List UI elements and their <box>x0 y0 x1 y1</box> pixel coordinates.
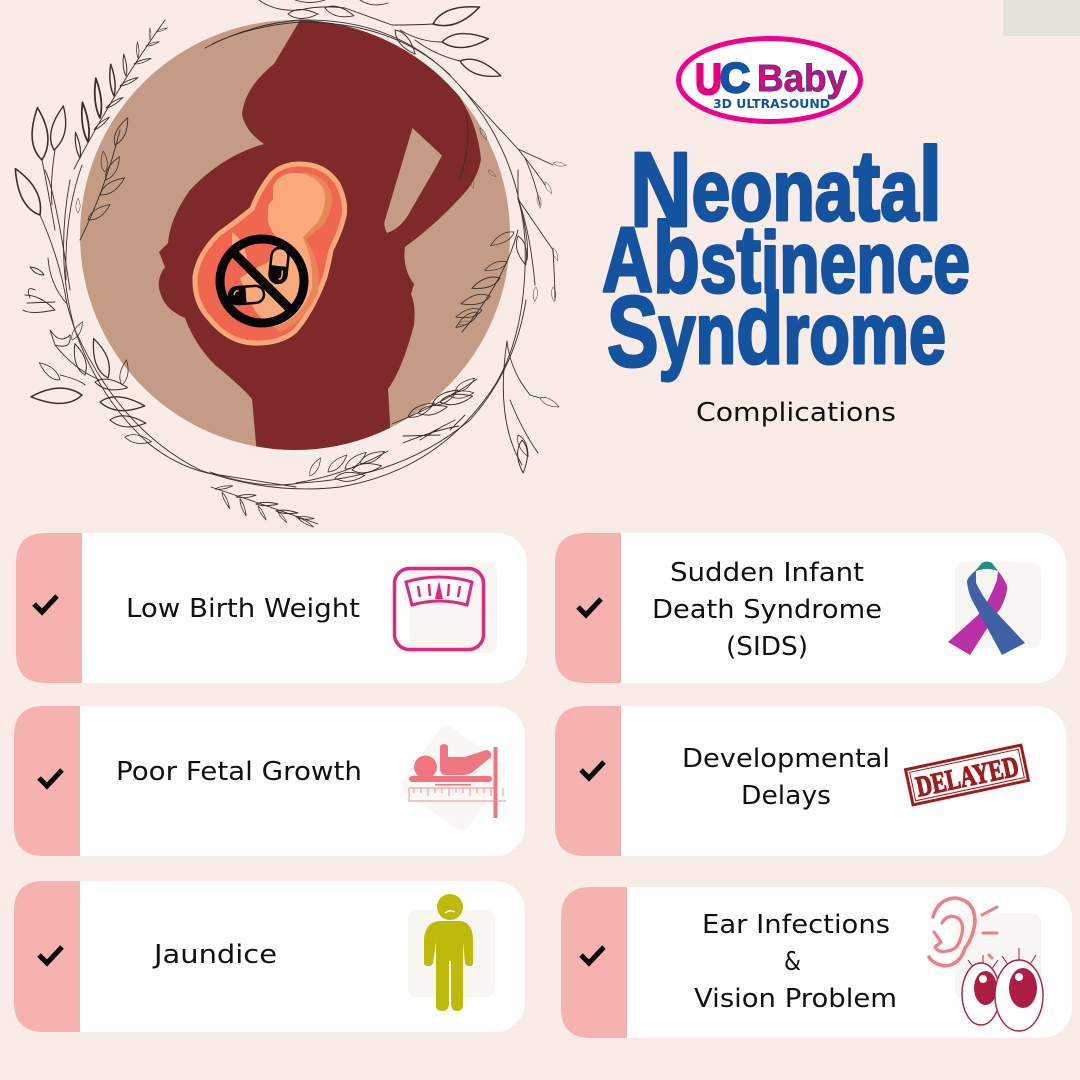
lower right branches <box>503 341 540 465</box>
illustration: pregnant silhouette in circle <box>80 10 510 455</box>
panel: SIDS: Death Syndrome <box>652 595 882 625</box>
bottom sprigs <box>296 451 388 483</box>
logo: C <box>720 54 750 101</box>
right upper branch <box>459 85 553 205</box>
panel: low birth weight <box>16 533 527 683</box>
fetus <box>255 173 332 332</box>
logo <box>678 38 860 122</box>
no drugs sign <box>220 239 304 323</box>
icon: awareness ribbon <box>948 562 1041 655</box>
logo tagline: 3D ULTRASOUND <box>713 97 830 111</box>
icon: scale <box>394 563 497 653</box>
title: b <box>653 202 700 314</box>
logo mark: UC: U <box>695 55 722 104</box>
panel: SIDS <box>555 533 1066 683</box>
panel: developmental delays <box>555 706 1066 856</box>
uterus <box>195 164 345 343</box>
title: N <box>630 131 692 249</box>
panel: SIDS: Sudden Infant <box>670 558 864 588</box>
left long leaves <box>40 150 70 304</box>
panel: low birth weight: Low Birth Weight <box>126 594 360 624</box>
panel: ear infections and vision problem <box>561 887 1072 1038</box>
subtitle: Complications <box>696 398 896 428</box>
corner image fragment <box>1003 0 1080 36</box>
panel: SIDS: (SIDS) <box>726 632 808 662</box>
title: eona <box>692 143 854 239</box>
panel: developmental delays: Delays <box>741 781 831 811</box>
panel: ear infections and vision problem: Vision Problem <box>694 984 897 1014</box>
icon: measuring infant <box>398 722 510 834</box>
panel: ear infections and vision problem: Ear Infections <box>702 910 890 940</box>
right bud branches <box>518 199 555 300</box>
icon: jaundiced person <box>408 894 495 1011</box>
left feather <box>74 20 165 169</box>
panel: jaundice: Jaundice <box>152 940 277 970</box>
panel: poor fetal growth <box>14 706 525 856</box>
illustration: botanical wreath <box>8 0 567 528</box>
title: stinence <box>700 206 1033 313</box>
title: A <box>602 209 653 311</box>
title: drome <box>736 273 994 385</box>
silhouette <box>159 10 481 455</box>
title: tal <box>853 127 948 243</box>
icon: delayed stamp: DELAYED <box>913 750 1022 803</box>
lower left leaves <box>50 304 296 487</box>
title: yn <box>659 286 736 382</box>
panel: poor fetal growth: Poor Fetal Growth <box>116 757 362 787</box>
panel: ear infections and vision problem: & <box>784 947 801 977</box>
title: S <box>607 276 659 388</box>
top sprigs <box>259 0 433 25</box>
logo wordmark: Baby: Baby <box>757 58 847 100</box>
inner left sprig <box>80 130 120 240</box>
icon: ear and eyes <box>929 898 1043 1031</box>
panel: jaundice <box>14 881 525 1032</box>
panel: developmental delays: Developmental <box>682 744 890 774</box>
title <box>602 127 970 388</box>
